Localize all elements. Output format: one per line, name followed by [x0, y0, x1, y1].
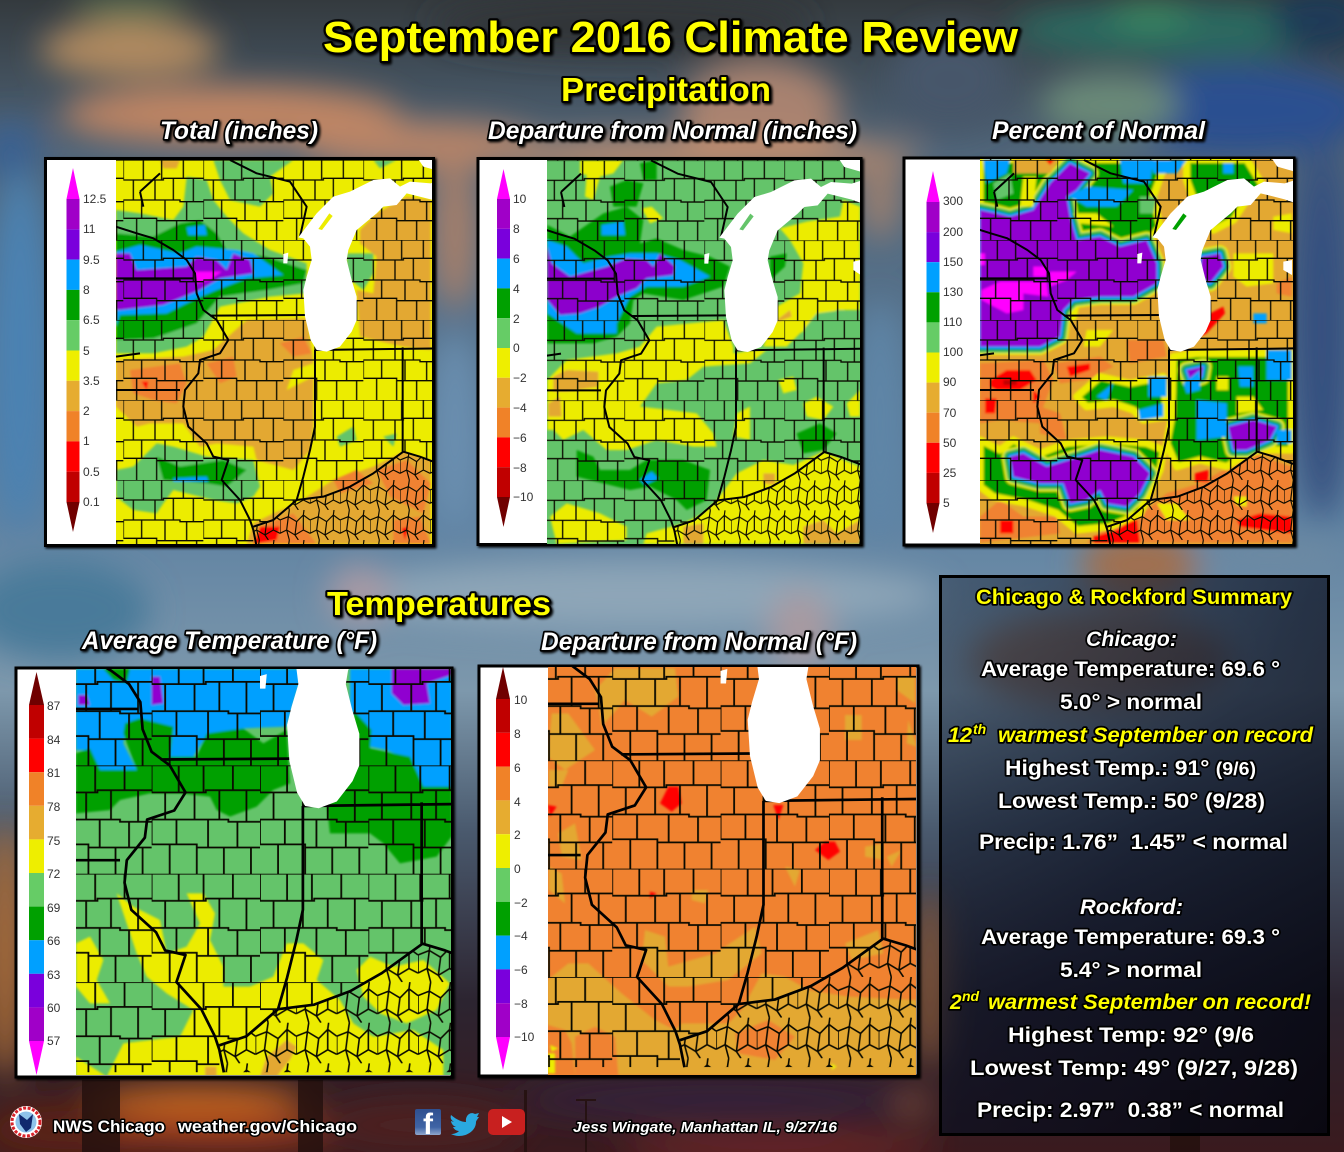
- Rockford statistics: Precip: 2.97” 0.38” < normal: [977, 1099, 1284, 1122]
- photo credit: Jess Wingate, Manhattan IL, 9/27/16: [573, 1119, 838, 1136]
- legend: total inches: 1: [83, 434, 90, 448]
- legend: departure inches: −8: [513, 461, 527, 475]
- panel: Chicago and Rockford summary: [940, 576, 1328, 1134]
- Chicago statistics: 5.0° > normal: [1060, 691, 1202, 714]
- heading: Total (inches): Total (inches): [160, 117, 318, 145]
- legend: departure inches: 0: [513, 341, 520, 355]
- legend: total inches: 5: [83, 344, 90, 358]
- legend: average temperature: 60: [47, 1001, 61, 1015]
- legend: average temperature: 72: [47, 867, 61, 881]
- footer text: NWS Chicago: NWS Chicago: [53, 1117, 165, 1136]
- legend: total inches: 6.5: [83, 313, 100, 327]
- Rockford statistics: Highest Temp: 92° (9/6: [1008, 1024, 1254, 1047]
- legend: total inches: 3.5: [83, 374, 100, 388]
- icon: twitter: [451, 1113, 479, 1136]
- Rockford statistics: Average Temperature: 69.3 °: [981, 926, 1280, 949]
- legend: temperature departure: 4: [514, 795, 521, 809]
- icon: facebook: f: [423, 1108, 434, 1141]
- legend: percent of normal: 25: [943, 466, 957, 480]
- heading: Precipitation: Precipitation: [561, 71, 771, 108]
- legend: temperature departure: −8: [514, 997, 528, 1011]
- Chicago statistics: Highest Temp.: 91° (9/6): [1005, 757, 1256, 780]
- icon: youtube: [488, 1109, 525, 1135]
- icon: facebook: [415, 1108, 441, 1141]
- legend: temperature departure: [496, 667, 535, 1070]
- legend: total inches: 8: [83, 283, 90, 297]
- legend: temperature departure: −2: [514, 896, 528, 910]
- map: precipitation departure contours: [547, 160, 860, 544]
- legend: total inches: 0.5: [83, 465, 100, 479]
- title: September 2016 Climate Review: [323, 13, 1019, 62]
- panel: total precipitation map: [46, 150, 447, 547]
- Rockford statistics: 5.4° > normal: [1060, 959, 1202, 982]
- legend: departure inches: 2: [513, 312, 520, 326]
- legend: temperature departure: −6: [514, 963, 528, 977]
- legend: percent of normal: 90: [943, 375, 957, 389]
- map: temperature departure contours: [548, 667, 916, 1075]
- legend: departure inches: −2: [513, 371, 527, 385]
- legend: departure inches: −6: [513, 431, 527, 445]
- legend: total inches: 2: [83, 404, 90, 418]
- panel: percent of normal map: [904, 150, 1301, 547]
- heading: Departure from Normal (inches): Departure from Normal (inches): [488, 117, 857, 145]
- legend: percent of normal: 300: [943, 194, 963, 208]
- Chicago statistics: warmest September on record: [998, 724, 1314, 747]
- legend: temperature departure: 10: [514, 693, 528, 707]
- map: total precipitation contours: [116, 160, 432, 544]
- Rockford statistics: nd: [962, 988, 980, 1004]
- Chicago statistics: 12: [948, 724, 972, 747]
- map: average temperature contours: [76, 669, 451, 1075]
- Chicago statistics: Lowest Temp.: 50° (9/28): [998, 790, 1265, 813]
- legend: average temperature: [29, 672, 61, 1075]
- legend: average temperature: 84: [47, 733, 61, 747]
- legend: total inches: [66, 168, 107, 532]
- legend: total inches: 12.5: [83, 192, 107, 206]
- legend: average temperature: 57: [47, 1034, 61, 1048]
- Chicago statistics: Chicago:: [1086, 628, 1177, 651]
- heading: Temperatures: Temperatures: [327, 585, 551, 622]
- legend: departure inches: −4: [513, 401, 527, 415]
- panel: temperature departure map: [477, 664, 923, 1080]
- Rockford statistics: [949, 896, 1311, 1122]
- legend: temperature departure: −10: [514, 1030, 535, 1044]
- summary heading: Chicago & Rockford Summary: [976, 586, 1292, 609]
- legend: temperature departure: 2: [514, 828, 521, 842]
- legend: average temperature: 87: [47, 699, 61, 713]
- legend: percent of normal: 200: [943, 225, 963, 239]
- heading: Departure from Normal temperature: Departure from Normal (°F): [541, 628, 857, 656]
- legend: departure inches: 10: [513, 192, 527, 206]
- legend: percent of normal: 5: [943, 496, 950, 510]
- legend: percent of normal: 130: [943, 285, 963, 299]
- legend: total inches: 0.1: [83, 495, 100, 509]
- Chicago statistics: Precip: 1.76” 1.45” < normal: [979, 831, 1288, 854]
- legend: percent of normal: 70: [943, 406, 957, 420]
- map: percent of normal contours: [980, 159, 1293, 544]
- legend: average temperature: 69: [47, 901, 61, 915]
- legend: departure inches: [497, 169, 534, 527]
- legend: average temperature: 75: [47, 834, 61, 848]
- Rockford statistics: Rockford:: [1080, 896, 1183, 919]
- Rockford statistics: warmest September on record!: [988, 991, 1311, 1014]
- legend: average temperature: 81: [47, 766, 61, 780]
- Rockford statistics: Lowest Temp: 49° (9/27, 9/28): [970, 1057, 1298, 1080]
- Rockford statistics: 2: [949, 991, 962, 1014]
- heading: Average Temperature: Average Temperature (°F): [81, 627, 377, 655]
- legend: temperature departure: 6: [514, 761, 521, 775]
- legend: temperature departure: 0: [514, 862, 521, 876]
- Chicago statistics: th: [973, 721, 986, 737]
- legend: average temperature: 63: [47, 968, 61, 982]
- legend: percent of normal: 110: [943, 315, 962, 329]
- legend: total inches: 11: [83, 222, 96, 236]
- legend: departure inches: −10: [513, 490, 534, 504]
- panel: average temperature map: [14, 666, 457, 1082]
- legend: temperature departure: 8: [514, 727, 521, 741]
- legend: average temperature: 78: [47, 800, 61, 814]
- footer text: website: weather.gov/Chicago: [177, 1117, 357, 1136]
- Chicago statistics: Average Temperature: 69.6 °: [981, 658, 1280, 681]
- legend: percent of normal: 100: [943, 345, 963, 359]
- legend: total inches: 9.5: [83, 253, 100, 267]
- legend: departure inches: 8: [513, 222, 520, 236]
- legend: percent of normal: 50: [943, 436, 957, 450]
- legend: average temperature: 66: [47, 934, 61, 948]
- icon: NWS logo: [10, 1106, 42, 1138]
- legend: percent of normal: [926, 171, 963, 533]
- legend: percent of normal: 150: [943, 255, 963, 269]
- Chicago statistics: [948, 628, 1314, 854]
- panel: departure from normal precipitation map: [478, 150, 868, 547]
- legend: departure inches: 6: [513, 252, 520, 266]
- heading: Percent of Normal: Percent of Normal: [992, 117, 1206, 145]
- legend: departure inches: 4: [513, 282, 520, 296]
- legend: temperature departure: −4: [514, 929, 528, 943]
